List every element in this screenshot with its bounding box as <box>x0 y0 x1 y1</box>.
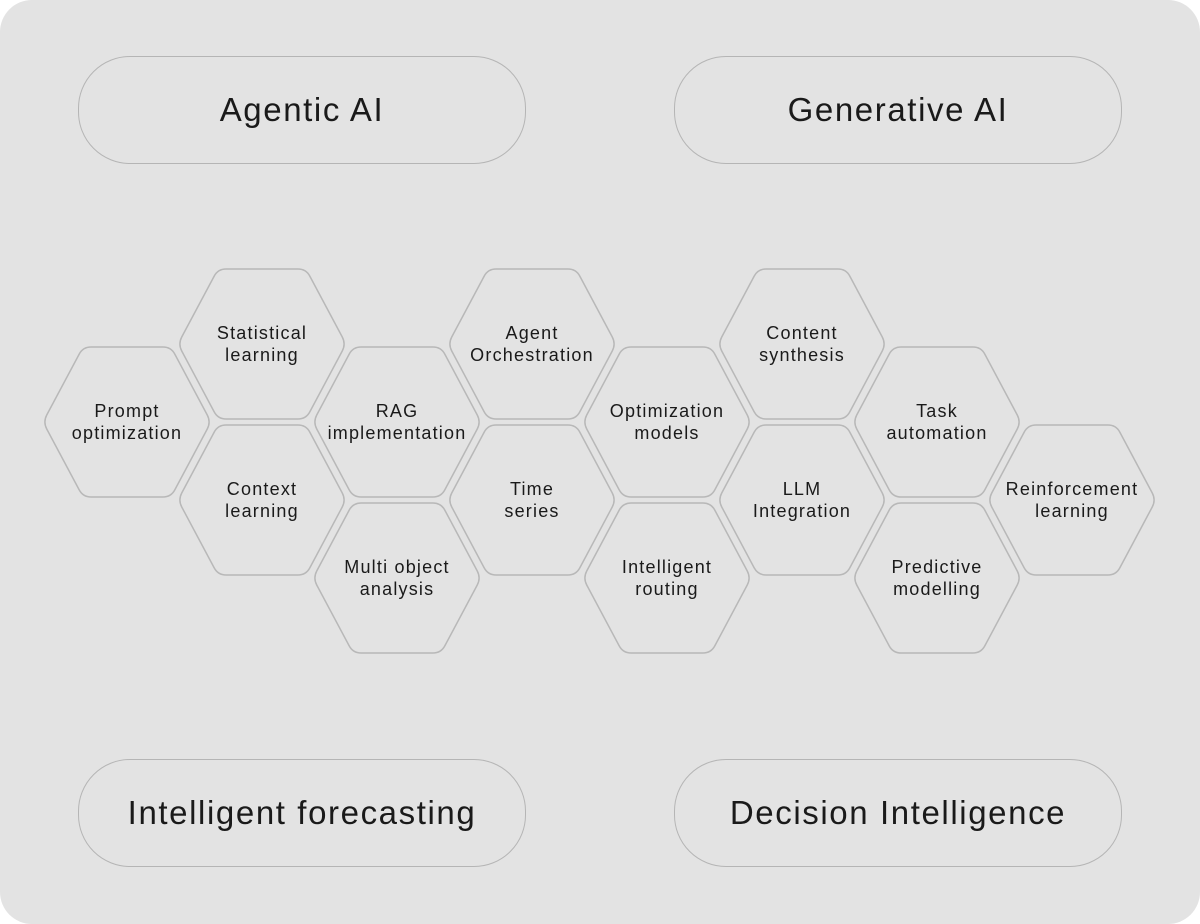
hex: Prompt optimization <box>45 347 209 497</box>
hex: Statistical learning: Statistical <box>217 323 307 343</box>
hex: Context learning: Context <box>227 479 297 499</box>
hex: Content synthesis <box>720 269 884 419</box>
hex: Content synthesis: Content <box>766 323 838 343</box>
hex: Optimization models: models <box>634 423 700 443</box>
hex: Task automation <box>855 347 1019 497</box>
hex: RAG implementation: implementation <box>328 423 466 443</box>
hex: Context learning <box>180 425 344 575</box>
hex: Prompt optimization: optimization <box>72 423 182 443</box>
hex: Time series: series <box>504 501 560 521</box>
hex: Agent Orchestration: Agent <box>505 323 559 343</box>
hex: Predictive modelling: modelling <box>893 579 981 599</box>
pill: Generative AI <box>674 56 1122 164</box>
pill: Decision Intelligence: Decision Intelligence <box>730 794 1066 831</box>
hex: Agent Orchestration: Orchestration <box>470 345 594 365</box>
hex: LLM Integration: Integration <box>753 501 851 521</box>
hex: Agent Orchestration <box>450 269 614 419</box>
hex: Optimization models: Optimization <box>610 401 724 421</box>
pill: Agentic AI <box>78 56 526 164</box>
hex: Optimization models <box>585 347 749 497</box>
hex: RAG implementation <box>315 347 479 497</box>
hex: Content synthesis: synthesis <box>759 345 845 365</box>
hex: Context learning: learning <box>225 501 299 521</box>
hex: Statistical learning <box>180 269 344 419</box>
hex: Reinforcement learning <box>990 425 1154 575</box>
pill: Decision Intelligence <box>674 759 1122 867</box>
hex: RAG implementation: RAG <box>376 401 418 421</box>
hex: LLM Integration <box>720 425 884 575</box>
hex: Task automation: automation <box>886 423 988 443</box>
hex: Reinforcement learning: learning <box>1035 501 1109 521</box>
hex: Intelligent routing: routing <box>635 579 699 599</box>
hex: Statistical learning: learning <box>225 345 299 365</box>
hex: Time series: Time <box>510 479 554 499</box>
hex: Time series <box>450 425 614 575</box>
hex: Task automation: Task <box>916 401 958 421</box>
hex: Intelligent routing: Intelligent <box>622 557 712 577</box>
hex: LLM Integration: LLM <box>783 479 821 499</box>
hex: Multi object analysis: analysis <box>360 579 434 599</box>
pill: Generative AI: Generative AI <box>788 91 1008 128</box>
pill: Intelligent forecasting: Intelligent forecasting <box>128 794 476 831</box>
hex: Prompt optimization: Prompt <box>94 401 160 421</box>
hex: Multi object analysis: Multi object <box>344 557 450 577</box>
pill: Agentic AI: Agentic AI <box>220 91 384 128</box>
hex: Intelligent routing <box>585 503 749 653</box>
hex: Predictive modelling: Predictive <box>891 557 983 577</box>
hex: Predictive modelling <box>855 503 1019 653</box>
pill: Intelligent forecasting <box>78 759 526 867</box>
hex: Multi object analysis <box>315 503 479 653</box>
hex: Reinforcement learning: Reinforcement <box>1006 479 1138 499</box>
